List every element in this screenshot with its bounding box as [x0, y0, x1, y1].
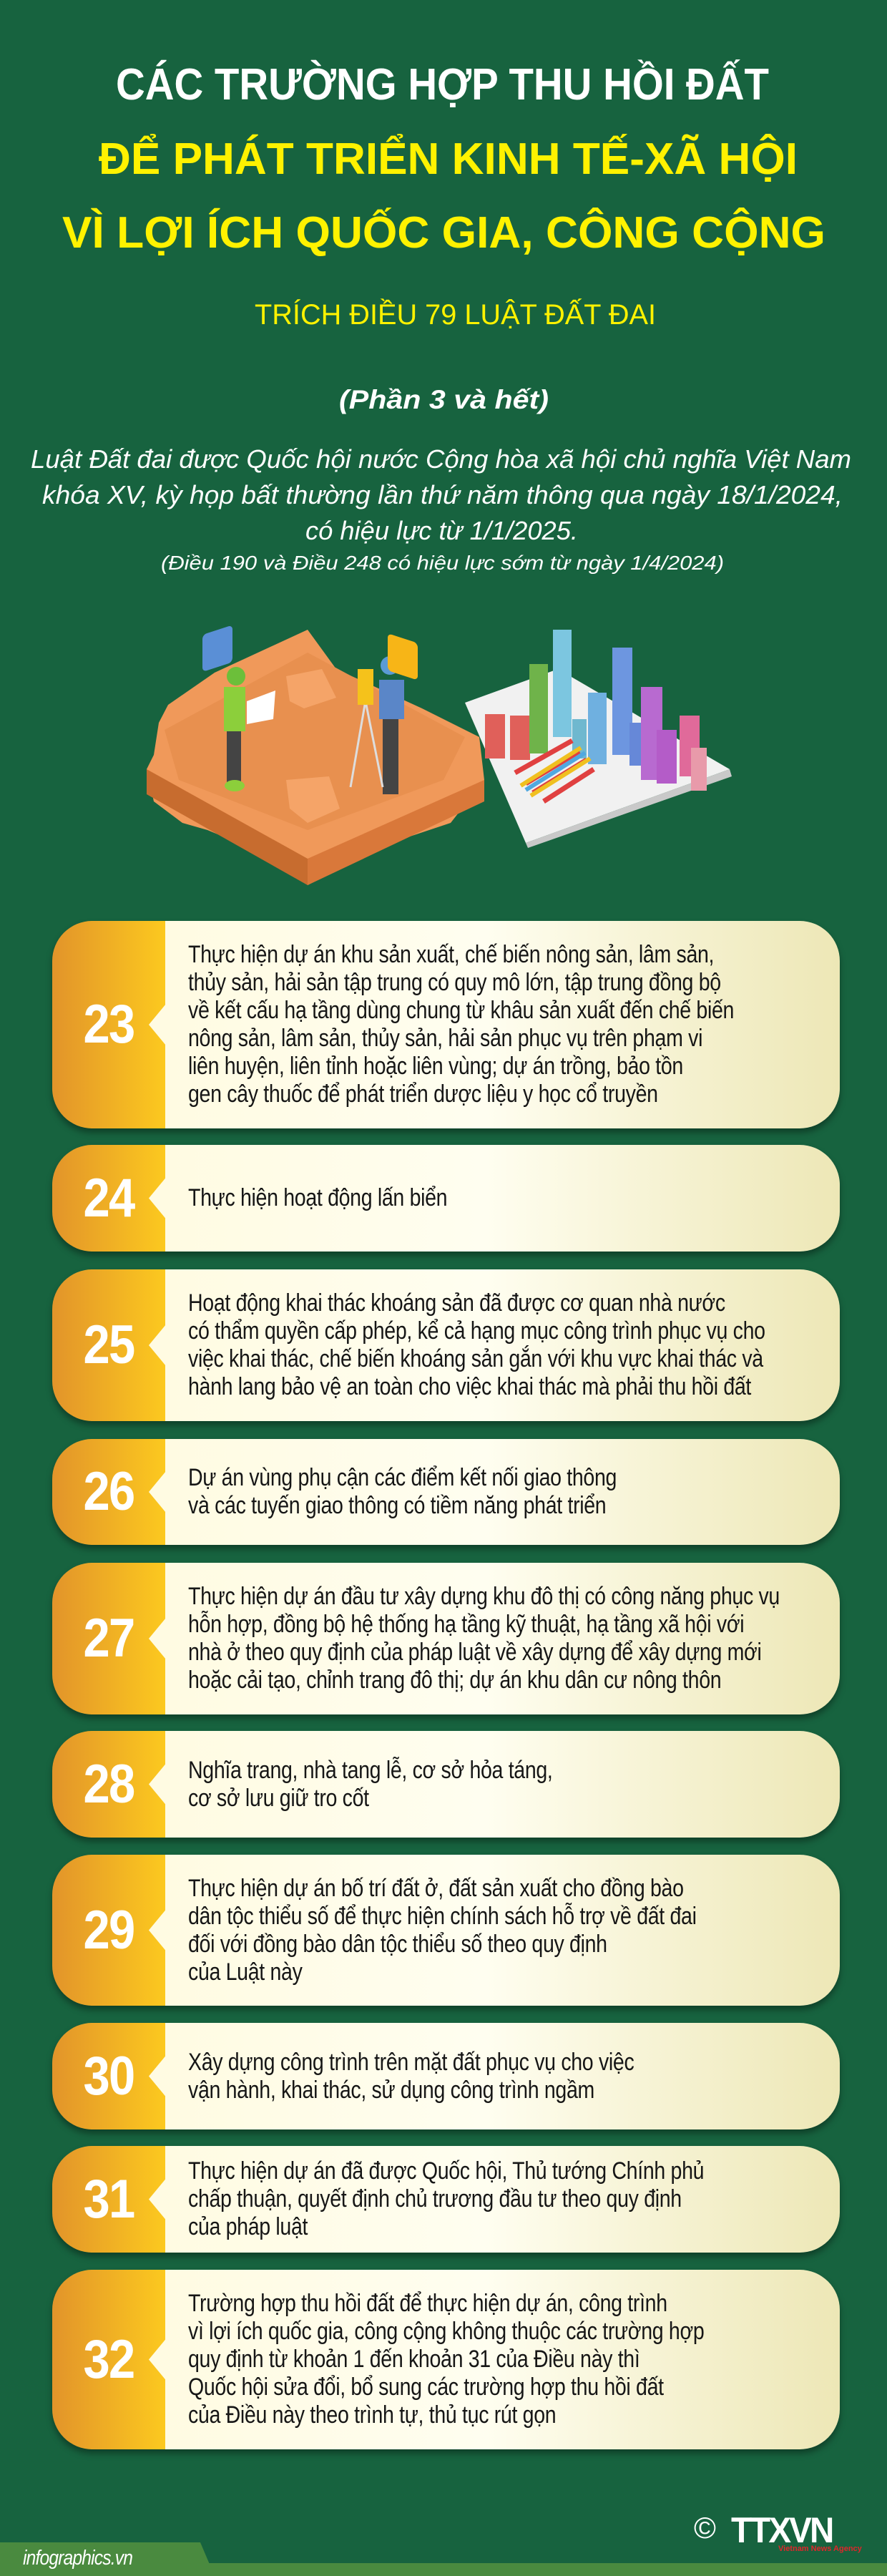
card 26: Dự án vùng phụ cận các điểm kết nối giao thông — [188, 1464, 617, 1491]
card 27: 27 — [84, 1608, 134, 1669]
card 30: 30 — [84, 2045, 134, 2107]
card 32: Quốc hội sửa đổi, bổ sung các trường hợp thu hồi đất — [188, 2373, 664, 2401]
card 30: Xây dựng công trình trên mặt đất phục vụ cho việc — [188, 2048, 634, 2075]
card 29: 29 — [84, 1899, 134, 1961]
illustration — [147, 626, 732, 885]
card 23: liên huyện, liên tỉnh hoặc liên vùng; dự án trồng, bảo tồn — [188, 1053, 683, 1080]
card 26: và các tuyến giao thông có tiềm năng phát triển — [188, 1492, 606, 1519]
card 31: của pháp luật — [188, 2213, 308, 2240]
card 23: Thực hiện dự án khu sản xuất, chế biến nông sản, lâm sản, — [188, 941, 714, 968]
icon: earth block with surveyors — [147, 625, 484, 885]
card 30 — [52, 2023, 840, 2129]
card 23 — [52, 921, 840, 1128]
card 25: việc khai thác, chế biến khoáng sản gắn với khu vực khai thác và — [188, 1345, 763, 1372]
card 31: chấp thuận, quyết định chủ trương đầu tư theo quy định — [188, 2185, 682, 2212]
card 26 — [52, 1439, 840, 1545]
card 32 — [52, 2270, 840, 2449]
card 31: Thực hiện dự án đã được Quốc hội, Thủ tướng Chính phủ — [188, 2157, 704, 2185]
card 28: Nghĩa trang, nhà tang lễ, cơ sở hỏa táng, — [188, 1756, 553, 1783]
title line 2: ĐỂ PHÁT TRIỂN KINH TẾ-XÃ HỘI — [99, 135, 798, 184]
intro paragraph: khóa XV, kỳ họp bất thường lần thứ năm thông qua ngày 18/1/2024, — [42, 480, 843, 509]
logo: TTXVN — [694, 2510, 862, 2553]
card 25 — [52, 1269, 840, 1421]
card 23: thủy sản, hải sản tập trung có quy mô lớn, tập trung đồng bộ — [188, 969, 721, 996]
footer tab: infographics.vn — [0, 2542, 209, 2569]
card 28 — [52, 1731, 840, 1838]
card 32: quy định từ khoản 1 đến khoản 31 của Điều này thì — [188, 2346, 639, 2373]
card 27: hỗn hợp, đồng bộ hệ thống hạ tầng kỹ thuật, hạ tầng xã hội với — [188, 1611, 744, 1638]
speech bubbles — [202, 625, 232, 672]
footer tab: infographics.vn: infographics.vn — [23, 2547, 132, 2570]
card 23: 23 — [84, 994, 134, 1055]
subtitle: TRÍCH ĐIỀU 79 LUẬT ĐẤT ĐAI — [255, 298, 656, 331]
intro paragraph: Luật Đất đai được Quốc hội nước Cộng hòa xã hội chủ nghĩa Việt Nam — [31, 444, 851, 474]
intro paragraph: (Điều 190 và Điều 248 có hiệu lực sớm từ ngày 1/4/2024) — [161, 552, 724, 574]
card 29: của Luật này — [188, 1958, 303, 1985]
logo: TTXVN: TTXVN — [731, 2510, 832, 2550]
card 24 — [52, 1145, 840, 1252]
card 25: Hoạt động khai thác khoáng sản đã được cơ quan nhà nước — [188, 1289, 725, 1317]
card 24: 24 — [84, 1168, 134, 1228]
card 31: 31 — [84, 2168, 134, 2230]
card 28: cơ sở lưu giữ tro cốt — [188, 1785, 369, 1812]
card 29: đối với đồng bào dân tộc thiểu số theo quy định — [188, 1931, 607, 1958]
card 29: Thực hiện dự án bố trí đất ở, đất sản xuất cho đồng bào — [188, 1875, 684, 1902]
card 25: 25 — [84, 1314, 134, 1375]
header — [31, 59, 851, 574]
card 32: Trường hợp thu hồi đất để thực hiện dự án, công trình — [188, 2290, 667, 2317]
card 23: gen cây thuốc để phát triển dược liệu y học cổ truyền — [188, 1080, 658, 1108]
card 28: 28 — [84, 1753, 134, 1815]
card 29: dân tộc thiểu số để thực hiện chính sách hỗ trợ về đất đai — [188, 1902, 697, 1929]
surveyor 1 — [224, 667, 275, 791]
title line 1: CÁC TRƯỜNG HỢP THU HỒI ĐẤT — [116, 60, 769, 109]
card 32: 32 — [84, 2328, 134, 2390]
card 24: Thực hiện hoạt động lấn biển — [188, 1184, 447, 1211]
footer bar — [0, 2563, 887, 2576]
card 27: nhà ở theo quy định của pháp luật về xây dựng để xây dựng mới — [188, 1639, 761, 1666]
card 27 — [52, 1563, 840, 1714]
card 25: có thẩm quyền cấp phép, kể cả hạng mục công trình phục vụ cho — [188, 1317, 765, 1345]
icon: 3D bar chart on paper — [465, 630, 732, 848]
card 25: hành lang bảo vệ an toàn cho việc khai thác mà phải thu hồi đất — [188, 1373, 751, 1400]
intro paragraph — [31, 444, 851, 574]
surveyor 2 — [351, 656, 404, 794]
logo: TTXVN: © — [694, 2511, 716, 2545]
card 23: về kết cấu hạ tầng dùng chung từ khâu sản xuất đến chế biến — [188, 997, 734, 1024]
part label: (Phần 3 và hết) — [339, 385, 549, 414]
card 27: Thực hiện dự án đầu tư xây dựng khu đô thị có công năng phục vụ — [188, 1583, 780, 1610]
card 26: 26 — [84, 1461, 134, 1522]
title line 3: VÌ LỢI ÍCH QUỐC GIA, CÔNG CỘNG — [62, 208, 825, 258]
intro paragraph: có hiệu lực từ 1/1/2025. — [305, 516, 578, 545]
card 29 — [52, 1855, 840, 2006]
card 23: nông sản, lâm sản, thủy sản, hải sản phục vụ trên phạm vi — [188, 1025, 702, 1052]
card 32: của Điều này theo trình tự, thủ tục rút gọn — [188, 2401, 556, 2429]
card 31 — [52, 2146, 840, 2253]
logo: TTXVN: Vietnam News Agency — [778, 2545, 862, 2553]
card 30: vận hành, khai thác, sử dụng công trình ngầm — [188, 2077, 594, 2104]
card 32: vì lợi ích quốc gia, công cộng không thuộc các trường hợp — [188, 2318, 704, 2345]
card 27: hoặc cải tạo, chỉnh trang đô thị; dự án khu dân cư nông thôn — [188, 1667, 721, 1694]
